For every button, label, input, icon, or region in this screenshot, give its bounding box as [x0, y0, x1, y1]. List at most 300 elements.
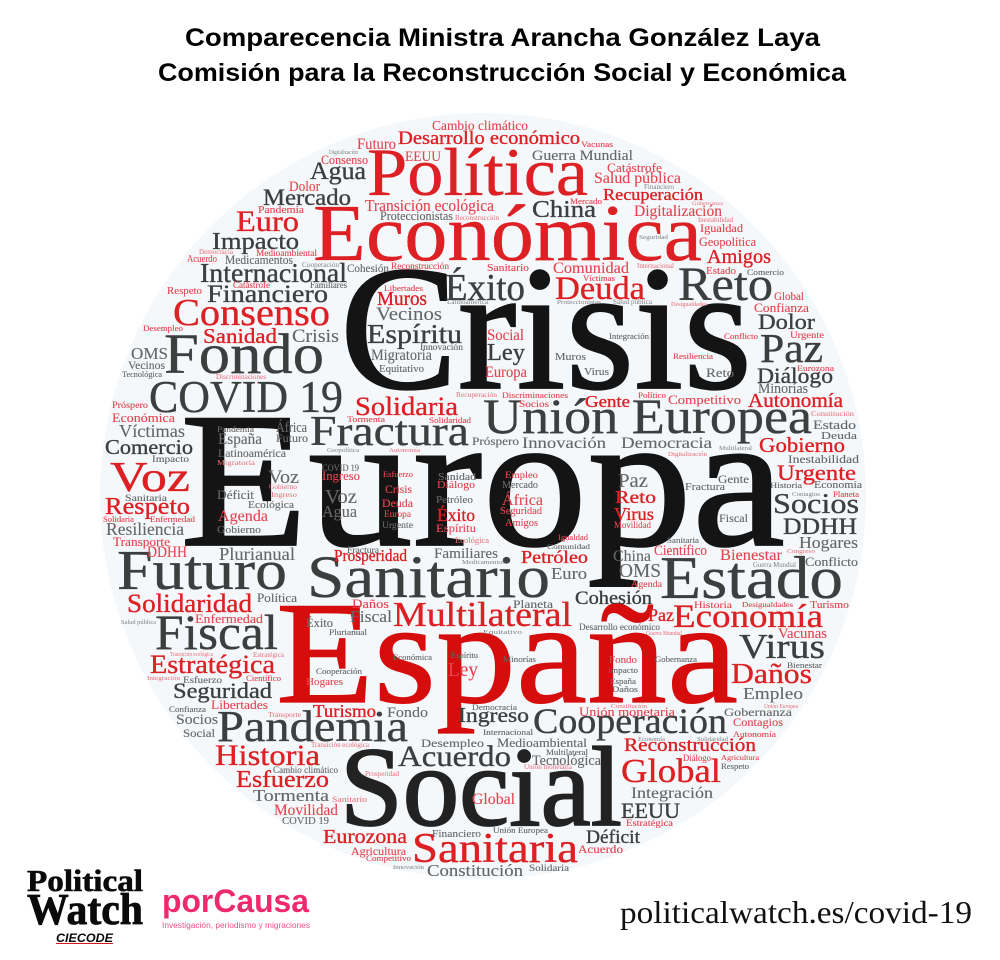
- tiny red words: Ecológica: [455, 535, 489, 545]
- medium red words: Sanitaria: [412, 826, 578, 872]
- small grey words: Multilateral: [546, 747, 589, 757]
- small grey words: Respeto: [721, 761, 749, 771]
- medium grey words: Fiscal: [155, 604, 278, 660]
- medium red words: Autonomía: [748, 390, 843, 412]
- medium red words: Recuperación: [603, 185, 704, 204]
- small grey words: Gobernanza: [655, 654, 697, 664]
- small grey words: Víctimas: [119, 421, 185, 441]
- medium grey words: Seguridad: [173, 678, 272, 703]
- small red words: Económica: [112, 410, 175, 425]
- small grey words: Minorías: [503, 654, 536, 664]
- small grey words: Medioambiental: [497, 735, 587, 750]
- word: Europa: Europa: [180, 373, 785, 587]
- medium red words: Gobierno: [759, 433, 845, 457]
- small red words: Libertades: [211, 697, 268, 712]
- small grey words: Agua: [322, 502, 357, 521]
- small grey words: Virus: [584, 366, 609, 378]
- medium grey words: Dolor: [758, 309, 816, 334]
- small grey words: Estado: [813, 417, 856, 432]
- medium red words: Turismo: [313, 701, 376, 721]
- small grey words: Planeta: [513, 597, 554, 611]
- logo: porCausa: Investigación, periodismo y migraciones: [162, 921, 310, 930]
- small red words: Esfuerzo: [383, 469, 413, 479]
- tiny grey words: Proteccionistas: [557, 300, 602, 306]
- tiny grey words: Salud pública: [121, 620, 156, 626]
- medium grey words: Pandemia: [217, 702, 408, 751]
- website url: politicalwatch.es/covid-19: [620, 894, 972, 930]
- small red words: Competitivo: [366, 853, 411, 863]
- medium grey words: Fractura: [310, 409, 469, 455]
- medium grey words: Reto: [678, 258, 773, 311]
- small grey words: Medicamentos: [225, 252, 293, 267]
- small red words: Global: [472, 791, 515, 808]
- medium grey words: Espíritu: [367, 319, 463, 349]
- medium grey words: Socios: [773, 489, 859, 520]
- small red words: Víctimas: [583, 273, 615, 283]
- small red words: Catástrofe: [233, 280, 270, 291]
- medium grey words: Fondo: [164, 323, 324, 386]
- medium grey words: Comercio: [105, 435, 193, 459]
- tiny grey words: Cooperación: [302, 260, 339, 269]
- small grey words: Deuda: [821, 430, 857, 442]
- small grey words: Desarrollo económico: [579, 623, 660, 633]
- small grey words: Éxito: [306, 615, 333, 630]
- small grey words: Bienestar: [787, 660, 822, 670]
- small grey words: Familiares: [310, 281, 347, 291]
- small red words: Agricultura: [721, 753, 760, 762]
- medium red words: Voz: [110, 455, 190, 501]
- medium red words: Estratégica: [150, 650, 275, 679]
- tiny red words: Migratoria: [217, 458, 256, 467]
- medium red words: Multilateral: [393, 595, 572, 634]
- small red words: Enfermedad: [195, 611, 264, 626]
- medium grey words: DDHH: [783, 514, 857, 539]
- small grey words: Historia: [770, 480, 802, 490]
- small red words: Digitalización: [634, 203, 722, 220]
- small grey words: Plurianual: [219, 544, 295, 564]
- medium grey words: Ingreso: [458, 703, 529, 727]
- tiny red words: Integración: [147, 676, 180, 682]
- small red words: Vacunas: [581, 139, 613, 149]
- tiny grey words: Solidaridad: [697, 737, 728, 743]
- tiny grey words: Medicamentos: [462, 560, 506, 566]
- tiny red words: Prosperidad: [365, 769, 399, 778]
- medium grey words: Diálogo: [757, 363, 833, 388]
- small red words: Mercado: [570, 196, 602, 206]
- tiny red words: Desigualdades: [671, 302, 708, 308]
- medium grey words: Unión Europea: [483, 388, 812, 444]
- small red words: Historia: [694, 601, 733, 611]
- medium red words: Desarrollo económico: [398, 128, 580, 149]
- medium red words: Daños: [731, 658, 812, 690]
- medium grey words: Mercado: [263, 185, 351, 210]
- small grey words: Desempleo: [421, 736, 484, 750]
- small grey words: Empleo: [743, 684, 803, 703]
- small grey words: Confianza: [169, 704, 206, 714]
- small red words: Cambio climático: [432, 119, 528, 134]
- medium grey words: Cooperación: [533, 701, 727, 741]
- small red words: Global: [774, 289, 805, 303]
- small red words: Desigualdades: [742, 600, 793, 609]
- tiny red words: Estratégica: [253, 650, 285, 659]
- small red words: Europa: [485, 364, 527, 381]
- medium grey words: China: [532, 197, 596, 223]
- small grey words: Resiliencia: [106, 519, 184, 539]
- word: Económica: Económica: [313, 190, 702, 278]
- word: Crisis: Crisis: [340, 229, 752, 427]
- logo: Political Watch: Political: [27, 863, 143, 898]
- small red words: Urgente: [790, 331, 824, 341]
- small red words: Empleo: [505, 471, 538, 481]
- small red words: Desempleo: [143, 323, 183, 333]
- title: Comparecencia Ministra Arancha González Laya: [185, 24, 821, 52]
- tiny red words: Inestabilidad: [698, 215, 733, 224]
- small red words: Igualdad: [700, 221, 743, 235]
- small grey words: Comercio: [747, 267, 784, 277]
- small red words: Enfermedad: [150, 514, 196, 524]
- tiny red words: Transporte: [268, 710, 302, 719]
- small red words: Dolor: [289, 179, 320, 195]
- word cloud circle background: [100, 113, 866, 879]
- medium red words: Paz: [648, 605, 674, 625]
- medium grey words: Paz: [760, 325, 823, 371]
- tiny red words: [147, 202, 854, 804]
- title: [158, 24, 847, 87]
- small red words: Socios: [519, 400, 549, 410]
- small red words: Comunidad: [553, 260, 629, 277]
- small grey words: Minorías: [758, 381, 808, 397]
- small grey words: Impacto: [608, 665, 638, 675]
- tiny grey words: Economía: [638, 737, 665, 743]
- small grey words: Plurianual: [329, 627, 368, 637]
- small grey words: Futuro: [276, 431, 308, 445]
- word: Social: Social: [340, 725, 622, 850]
- small red words: Autonomía: [733, 729, 776, 739]
- medium grey words: EEUU: [621, 798, 680, 823]
- medium red words: Gente: [585, 392, 630, 411]
- small grey words: Latinoamérica: [218, 446, 287, 460]
- tiny red words: Discriminaciones: [216, 372, 266, 381]
- small red words: Confianza: [754, 300, 809, 315]
- small red words: Diálogo: [437, 479, 476, 491]
- small grey words: Esfuerzo: [183, 675, 222, 686]
- medium grey words: COVID 19: [149, 372, 343, 422]
- small grey words: Fractura: [347, 546, 380, 556]
- tiny red words: Digitalización: [668, 452, 707, 458]
- small grey words: Equitativo: [379, 363, 424, 375]
- small grey words: Mercado: [502, 479, 538, 491]
- tiny red words: Recuperación: [456, 390, 497, 399]
- medium grey words: Virus: [739, 627, 825, 666]
- medium red words: Urgente: [777, 460, 856, 485]
- small grey words: COVID 19: [322, 464, 359, 474]
- small red words: Consenso: [321, 152, 368, 167]
- small grey words: Integración: [609, 331, 650, 341]
- medium grey words: Estado: [660, 545, 843, 611]
- small grey words: Comunidad: [547, 542, 590, 551]
- tiny red words: Gobernanza: [692, 202, 724, 207]
- medium red words: Consenso: [173, 292, 330, 334]
- small red words: Catástrofe: [607, 160, 662, 175]
- small red words: Turismo: [810, 599, 850, 611]
- small red words: Seguridad: [500, 505, 542, 517]
- tiny red words: Autonomía: [389, 448, 420, 454]
- small red words: Estratégica: [626, 819, 674, 829]
- small grey words: Pandemia: [217, 424, 254, 434]
- medium grey words: Cohesión: [575, 588, 653, 609]
- medium red words: Reto: [615, 487, 656, 507]
- tiny red words: Reconstrucción: [455, 213, 499, 222]
- small grey words: Vecinos: [376, 304, 442, 325]
- small grey words: Cooperación: [316, 666, 363, 676]
- small grey words: Próspero: [472, 434, 519, 448]
- small grey words: Socios: [176, 712, 218, 728]
- small red words: Competitivo: [668, 392, 741, 407]
- logo: Political Watch: Watch: [27, 885, 143, 934]
- medium grey words: Déficit: [586, 827, 641, 848]
- small grey words: Unión Europea: [493, 825, 548, 835]
- small red words: Transporte: [113, 534, 170, 549]
- logo: Political Watch: CIECODE: [56, 933, 113, 945]
- small red words: Tormenta: [347, 414, 385, 424]
- small grey words: Sanitaria: [667, 535, 699, 545]
- small red words: Científico: [246, 673, 281, 683]
- small red words: Crisis: [385, 482, 412, 496]
- small grey words: Innovación: [420, 343, 463, 353]
- tiny red words: Guerra Mundial: [646, 631, 682, 637]
- title: Comisión para la Reconstrucción Social y Económica: [158, 59, 847, 87]
- small grey words: Fractura: [685, 481, 725, 493]
- small red words: Agenda: [631, 580, 663, 590]
- small red words: Científico: [654, 543, 707, 559]
- medium red words: Esfuerzo: [236, 767, 329, 793]
- small red words: Eurozona: [797, 363, 834, 373]
- small red words: Reconstrucción: [391, 262, 449, 272]
- medium grey words: Ley: [487, 340, 525, 366]
- tiny red words: Constitución: [811, 409, 854, 418]
- small red words: Bienestar: [720, 547, 783, 564]
- small grey words: Daños: [612, 684, 638, 694]
- small grey words: Voz: [325, 486, 357, 508]
- logo: porCausa: porCausa: [162, 883, 309, 919]
- small red words: Transición ecológica: [365, 196, 494, 215]
- tiny red words: Democracia: [199, 247, 234, 256]
- small red words: Próspero: [112, 401, 148, 411]
- tiny grey words: Guerra Mundial: [753, 560, 796, 569]
- small grey words: Social: [183, 726, 216, 740]
- small red words: Acuerdo: [578, 842, 623, 856]
- small red words: Agenda: [218, 508, 268, 525]
- small grey words: Proteccionistas: [380, 208, 453, 223]
- small red words: Diálogo: [683, 754, 711, 764]
- medium grey words: Internacional: [200, 258, 347, 288]
- medium red words: Petróleo: [521, 547, 588, 567]
- small red words: [103, 119, 859, 863]
- small grey words: Innovación: [522, 435, 606, 452]
- small grey words: Guerra Mundial: [532, 148, 633, 164]
- medium grey words: [105, 158, 859, 848]
- small grey words: Migratoria: [371, 347, 432, 364]
- small red words: Ingreso: [322, 468, 360, 483]
- small grey words: [106, 148, 862, 880]
- small grey words: África: [276, 419, 307, 436]
- small grey words: Económica: [393, 652, 432, 662]
- small grey words: Hogares: [799, 533, 858, 552]
- small grey words: Reto: [706, 365, 734, 380]
- medium red words: Deuda: [555, 271, 645, 307]
- logo: Political Watch: [27, 863, 143, 945]
- small red words: Solidaria: [103, 514, 134, 524]
- small red words: Acuerdo: [187, 253, 217, 265]
- tiny grey words: Financiero: [644, 182, 674, 191]
- small red words: Resiliencia: [673, 351, 713, 361]
- small red words: Hogares: [306, 676, 343, 688]
- small grey words: China: [613, 548, 651, 565]
- tiny grey words: Seguridad: [639, 235, 668, 241]
- small grey words: España: [218, 431, 262, 448]
- small grey words: Espíritu: [451, 650, 479, 660]
- medium red words: Eurozona: [323, 826, 407, 848]
- small grey words: Gobernanza: [724, 705, 793, 719]
- medium red words: Amigos: [707, 246, 771, 268]
- tiny grey words: Equitativo: [483, 630, 522, 636]
- small grey words: Voz: [268, 467, 299, 488]
- small grey words: Gente: [718, 472, 749, 486]
- small grey words: Crisis: [292, 326, 339, 347]
- small red words: Ley: [448, 659, 478, 681]
- small grey words: Paz: [618, 470, 648, 492]
- medium red words: Éxito: [437, 504, 475, 525]
- tiny red words: Unión monetaria: [524, 762, 573, 771]
- medium red words: Historia: [215, 739, 320, 772]
- small red words: Vacunas: [778, 626, 827, 642]
- small red words: Conflicto: [724, 331, 758, 341]
- small red words: África: [502, 492, 543, 509]
- medium red words: Reconstrucción: [624, 735, 757, 756]
- small grey words: Urgente: [382, 521, 413, 531]
- small red words: Agricultura: [351, 844, 407, 858]
- small red words: Futuro: [357, 136, 396, 153]
- tiny grey words: Multilateral: [719, 446, 752, 452]
- tiny grey words: Innovación: [393, 865, 424, 871]
- small grey words: Fiscal: [350, 607, 392, 626]
- small grey words: Ecológica: [248, 499, 294, 511]
- small grey words: Petróleo: [436, 494, 473, 506]
- small red words: DDHH: [147, 544, 187, 561]
- small grey words: Fondo: [387, 705, 428, 721]
- small grey words: Tecnológica: [532, 753, 602, 769]
- small grey words: Política: [257, 590, 297, 605]
- tiny grey words: Contagios: [792, 492, 821, 498]
- small red words: Respeto: [167, 285, 202, 297]
- tiny red words: Congreso: [787, 549, 815, 555]
- small grey words: Tecnológica: [122, 369, 162, 379]
- small red words: Movilidad: [274, 802, 338, 819]
- small red words: Daños: [352, 596, 389, 611]
- small red words: Geopolítica: [699, 234, 756, 249]
- tiny red words: Gobierno: [269, 482, 297, 491]
- medium red words: Euro: [236, 205, 299, 238]
- small grey words: Solidaria: [529, 864, 570, 874]
- medium grey words: Éxito: [445, 267, 525, 309]
- small red words: Contagios: [733, 715, 783, 729]
- small red words: Movilidad: [614, 521, 651, 531]
- small grey words: Gobierno: [217, 524, 262, 536]
- small grey words: Muros: [555, 351, 586, 363]
- tiny red words: Sanitario: [332, 794, 367, 804]
- tiny red words: Transición ecológica: [311, 740, 370, 749]
- small red words: Europa: [384, 510, 412, 520]
- small grey words: COVID 19: [282, 815, 329, 827]
- small grey words: Déficit: [217, 487, 254, 502]
- tiny red words: Transición ecológica: [170, 652, 213, 658]
- small grey words: Sanitaria: [125, 494, 168, 504]
- medium red words: Economía: [673, 599, 823, 635]
- medium red words: Solidaridad: [127, 589, 252, 618]
- small grey words: Tormenta: [253, 786, 330, 805]
- tiny grey words: Latinoamérica: [447, 297, 489, 306]
- medium red words: Muros: [377, 288, 427, 310]
- small grey words: Sanidad: [438, 471, 477, 483]
- small red words: Pandemia: [258, 204, 304, 216]
- small grey words: España: [610, 676, 636, 686]
- small grey words: Cambio climático: [273, 766, 338, 776]
- small grey words: Impacto: [152, 455, 189, 465]
- small red words: Sanitario: [487, 262, 530, 274]
- medium grey words: Acuerdo: [398, 740, 511, 773]
- tiny grey words: [121, 150, 821, 871]
- medium red words: Respeto: [105, 494, 190, 520]
- tiny red words: Ingreso: [271, 490, 297, 499]
- small grey words: Democracia: [621, 435, 712, 452]
- small red words: Estado: [706, 265, 736, 277]
- tiny red words: Unión Europea: [764, 704, 798, 710]
- medium red words: Prosperidad: [334, 546, 407, 565]
- medium red words: [105, 128, 856, 872]
- small red words: EEUU: [405, 149, 441, 165]
- small grey words: Internacional: [483, 727, 534, 737]
- small grey words: OMS: [619, 560, 661, 582]
- medium red words: Virus: [614, 504, 654, 524]
- tiny red words: Internacional: [637, 261, 674, 270]
- medium grey words: Sanitario: [307, 544, 550, 610]
- medium grey words: Futuro: [117, 540, 287, 602]
- tiny red words: Constitución: [611, 704, 647, 710]
- small red words: Fondo: [609, 654, 637, 666]
- small grey words: Conflicto: [805, 554, 858, 569]
- medium grey words: Impacto: [212, 229, 299, 255]
- small grey words: OMS: [131, 344, 168, 363]
- small grey words: Democracia: [472, 702, 517, 712]
- small grey words: Fiscal: [719, 511, 749, 525]
- small red words: Amigos: [505, 517, 538, 529]
- small grey words: Vecinos: [128, 358, 165, 372]
- word cloud: [103, 119, 862, 880]
- tiny grey words: Geopolítica: [327, 448, 359, 454]
- small red words: Planeta: [833, 489, 859, 499]
- small grey words: Cohesión: [347, 261, 389, 275]
- small grey words: Integración: [631, 785, 713, 802]
- medium grey words: Agua: [310, 158, 366, 185]
- small grey words: Economía: [814, 479, 862, 491]
- small red words: Libertades: [384, 283, 423, 293]
- small red words: Social: [487, 327, 524, 344]
- small red words: Igualdad: [558, 532, 589, 542]
- word: Política: Política: [367, 134, 588, 210]
- small red words: Espíritu: [436, 521, 476, 535]
- small red words: Salud pública: [594, 170, 681, 187]
- medium grey words: Financiero: [207, 281, 328, 308]
